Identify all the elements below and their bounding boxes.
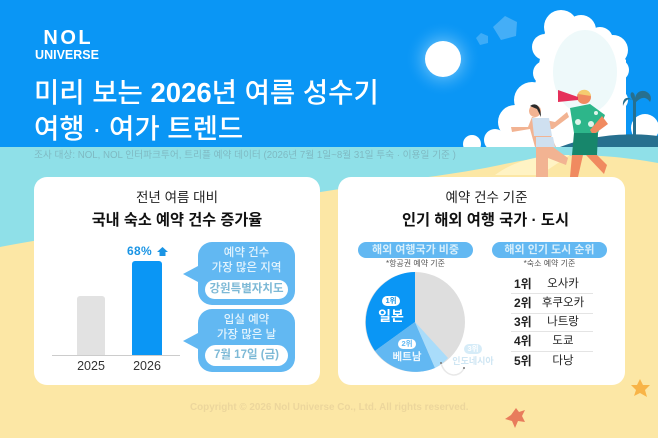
callout: top region: 예약 건수: [224, 247, 269, 259]
bar 2025: [77, 296, 105, 355]
title: [34, 77, 379, 144]
bar label 68%: 68%: [127, 244, 152, 258]
logo: [35, 27, 99, 62]
pie label: Indonesia: 인도네시아: [452, 356, 494, 366]
label: city ranking: 해외 인기 도시 순위: [504, 244, 595, 256]
note: lodging: *숙소 예약 기준: [524, 259, 575, 268]
rank 3: [511, 314, 593, 332]
bar chart: [77, 244, 168, 373]
rank 4: [511, 332, 593, 352]
pie label: Vietnam: 2위: [401, 339, 413, 348]
island: [560, 134, 658, 147]
rank 3: 3위: [514, 315, 532, 329]
pie label: Japan: 일본: [378, 308, 404, 324]
rank 1: 1위: [514, 277, 532, 291]
starfish red: [505, 408, 525, 428]
shore foam: [495, 155, 570, 175]
label: country share: [358, 242, 473, 258]
rank 4: 도쿄: [552, 335, 574, 347]
pie label: Vietnam: 베트남: [392, 351, 421, 363]
title: 미리 보는 2026년 여름 성수기: [34, 77, 379, 108]
cloud: [463, 10, 658, 153]
palm tree: [623, 91, 651, 137]
rank 2: 2위: [514, 296, 532, 310]
rank 5: [514, 354, 574, 368]
year 2025: 2025: [77, 359, 105, 373]
year 2026: 2026: [133, 359, 161, 373]
callout: top day: 입실 예약: [224, 314, 269, 326]
label: country share: 해외 여행국가 비중: [372, 244, 459, 256]
callout: top region: 강원특별자치도: [209, 283, 284, 295]
pie label: Japan: [378, 296, 404, 324]
baseline: [52, 355, 180, 356]
label: city ranking: [492, 242, 607, 258]
bar label 68%: [127, 244, 168, 258]
panel: overseas: [338, 177, 625, 385]
panel: domestic bookings: [34, 177, 320, 385]
city ranking table: [511, 277, 593, 368]
rank 5: 5위: [514, 354, 532, 368]
logo: UNIVERSE: [35, 48, 99, 62]
pentagon flares: [476, 16, 517, 45]
pie chart: [365, 272, 465, 376]
callout: top day: 7월 17일 (금): [214, 349, 279, 361]
callout: top day: [183, 309, 295, 372]
panel heading: 국내 숙소 예약 건수 증가율: [92, 212, 262, 229]
pie label: Indonesia: 3위: [467, 344, 479, 353]
rank 4: 4위: [514, 334, 532, 348]
title: 여행 · 여가 트렌드: [34, 113, 243, 144]
note: air tickets: *항공권 예약 기준: [386, 259, 445, 268]
bar 2026: [132, 261, 162, 355]
rank 1: 오사카: [547, 278, 579, 290]
logo: NOL: [43, 27, 93, 49]
rank 2: [511, 294, 593, 314]
panel subtitle: 전년 여름 대비: [136, 190, 218, 205]
rank 5: 다낭: [552, 355, 574, 367]
woman: [511, 104, 569, 177]
sea: [0, 147, 658, 247]
starfish orange: [631, 379, 650, 397]
sun: [405, 21, 481, 97]
rank 1: [511, 275, 593, 294]
callout: top region: 가장 많은 지역: [212, 262, 281, 274]
rank 3: 나트랑: [547, 316, 579, 328]
copyright: Copyright © 2026 Nol Universe Co., Ltd. All rights reserved.: [190, 402, 469, 413]
pie label: Vietnam: [392, 339, 422, 363]
panel heading: 인기 해외 여행 국가 · 도시: [402, 212, 569, 229]
pie label: Japan: 1위: [385, 296, 397, 305]
rank 2: 후쿠오카: [542, 297, 584, 309]
panel subtitle: 예약 건수 기준: [445, 190, 528, 205]
pie label: Indonesia: [452, 344, 494, 366]
callout: top region: [183, 242, 295, 305]
man with megaphone: [558, 90, 608, 177]
callout: top day: 가장 많은 날: [217, 329, 276, 341]
survey note: 조사 대상: NOL, NOL 인터파크투어, 트리플 예약 데이터 (2026년 7월 1일~8월 31일 투숙 · 이용일 기준 ): [34, 150, 456, 161]
